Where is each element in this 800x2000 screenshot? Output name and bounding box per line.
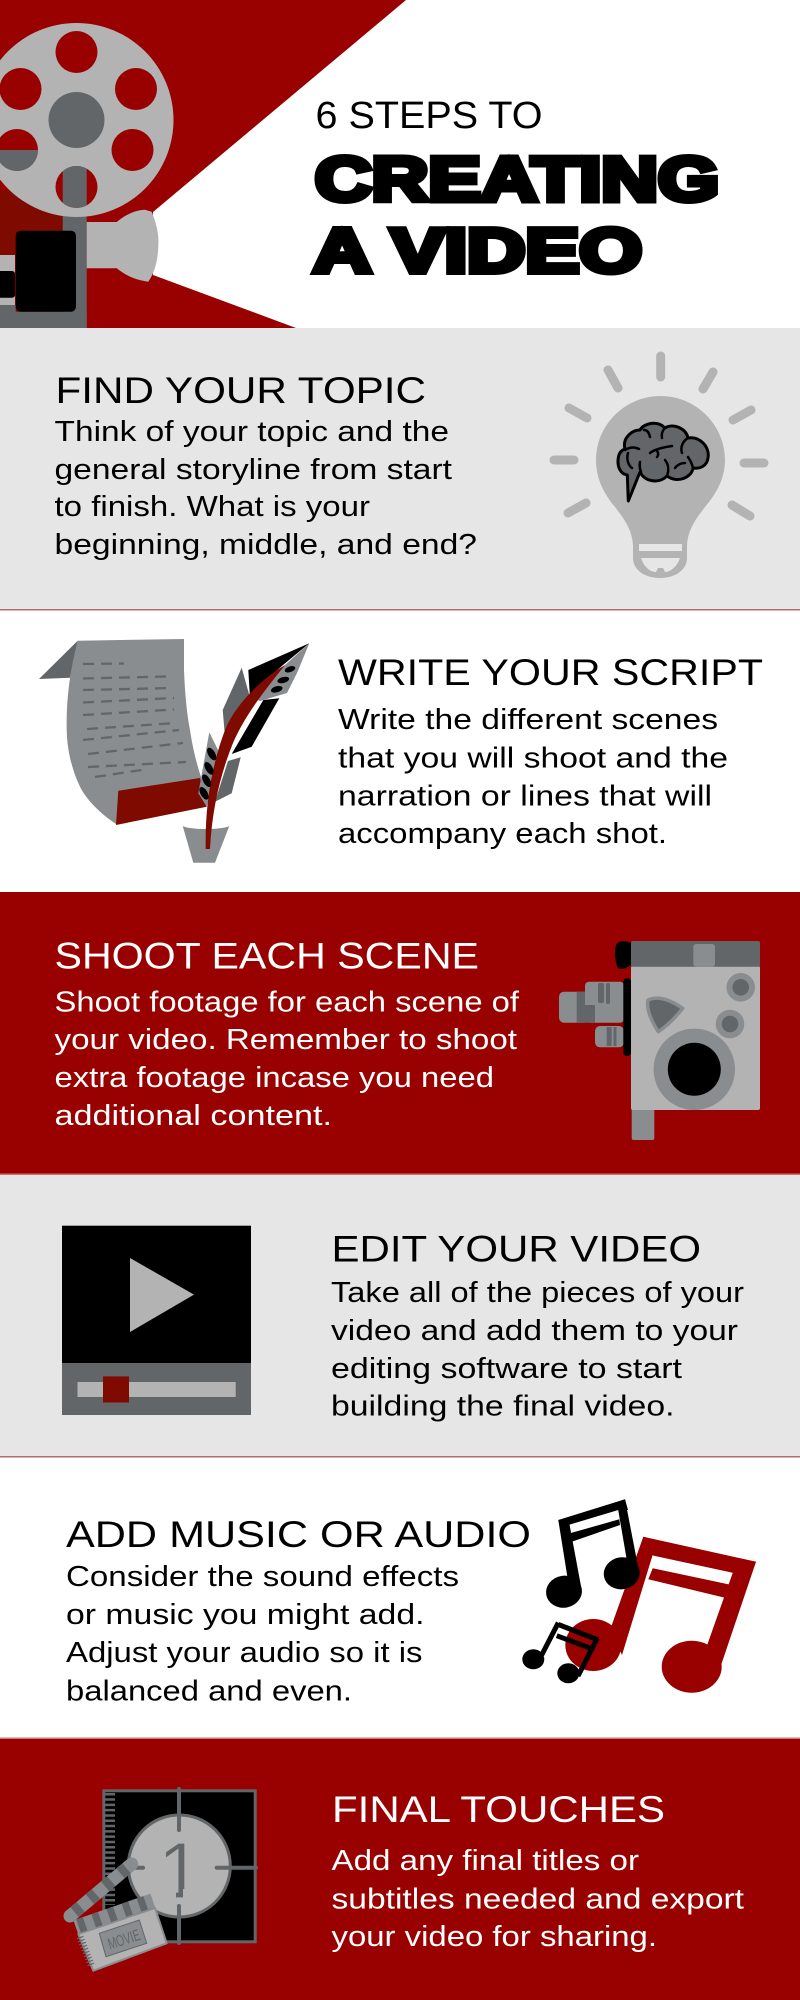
title: 6 STEPS TO	[316, 95, 542, 137]
icon: vintage movie camera	[559, 941, 760, 1140]
panel: header	[0, 0, 718, 328]
panel: write your script	[0, 610, 800, 892]
text block: write your script: narration or lines that will	[338, 780, 712, 812]
text block: add music or audio: Adjust your audio so it is	[66, 1637, 422, 1669]
text block: find your topic	[54, 416, 477, 561]
panel: final touches	[0, 1739, 800, 2000]
small black note	[522, 1623, 598, 1683]
icon: film projector	[0, 23, 174, 328]
text block: find your topic: beginning, middle, and end?	[54, 529, 477, 561]
title: CREATING	[315, 144, 719, 214]
red projector light beam	[0, 0, 406, 328]
icon: video player	[62, 1226, 251, 1415]
text block: write your script	[338, 704, 728, 850]
text block: add music or audio: or music you might add.	[66, 1599, 424, 1631]
red note	[565, 1537, 756, 1693]
clapperboard	[70, 1864, 167, 1971]
panel: shoot each scene	[0, 892, 800, 1175]
text block: final touches	[332, 1845, 744, 1953]
text block: write your script: Write the different scenes	[338, 704, 718, 736]
icon: scroll and quill	[39, 639, 309, 863]
text block: shoot each scene: additional content.	[54, 1100, 332, 1132]
text block: edit your video: building the final video.	[331, 1390, 674, 1422]
text block: shoot each scene	[54, 986, 520, 1132]
text block: find your topic: to finish. What is your	[54, 491, 370, 523]
countdown number: 1	[158, 1826, 202, 1915]
panel: edit your video	[0, 1175, 800, 1458]
text block: add music or audio	[66, 1561, 459, 1708]
heading: add music or audio: ADD MUSIC OR AUDIO	[66, 1514, 531, 1555]
text block: write your script: that you will shoot and the	[338, 742, 728, 774]
text block: edit your video	[331, 1277, 744, 1422]
title	[313, 95, 719, 286]
heading: shoot each scene: SHOOT EACH SCENE	[54, 936, 479, 976]
text block: edit your video: video and add them to your	[331, 1315, 738, 1347]
heading: find your topic: FIND YOUR TOPIC	[56, 370, 426, 411]
panel: add music or audio	[0, 1458, 800, 1739]
large black note	[543, 1499, 642, 1611]
text block: shoot each scene: your video. Remember to shoot	[54, 1024, 517, 1056]
text block: add music or audio: balanced and even.	[66, 1676, 352, 1708]
text block: shoot each scene: extra footage incase you need	[54, 1062, 494, 1094]
icon: music notes	[522, 1499, 756, 1693]
text block: final touches: your video for sharing.	[332, 1921, 657, 1953]
clapperboard label: MOVIE	[106, 1927, 143, 1953]
title: A VIDEO	[313, 216, 642, 286]
text block: final touches: subtitles needed and export	[332, 1884, 744, 1916]
heading: write your script: WRITE YOUR SCRIPT	[338, 652, 763, 693]
heading: final touches: FINAL TOUCHES	[332, 1789, 665, 1830]
icon: light bulb with brain	[554, 356, 764, 578]
text block: add music or audio: Consider the sound effects	[66, 1561, 459, 1593]
text block: write your script: accompany each shot.	[338, 818, 667, 850]
heading: edit your video: EDIT YOUR VIDEO	[332, 1228, 701, 1270]
text block: final touches: Add any final titles or	[332, 1845, 639, 1877]
text block: edit your video: editing software to start	[331, 1353, 682, 1385]
text block: find your topic: Think of your topic and the	[54, 416, 449, 448]
text block: edit your video: Take all of the pieces of your	[331, 1277, 744, 1309]
text block: find your topic: general storyline from start	[54, 454, 452, 486]
text block: shoot each scene: Shoot footage for each scene of	[54, 986, 520, 1018]
panel: find your topic	[0, 328, 800, 610]
icon: film countdown and clapperboard	[70, 1789, 256, 1971]
